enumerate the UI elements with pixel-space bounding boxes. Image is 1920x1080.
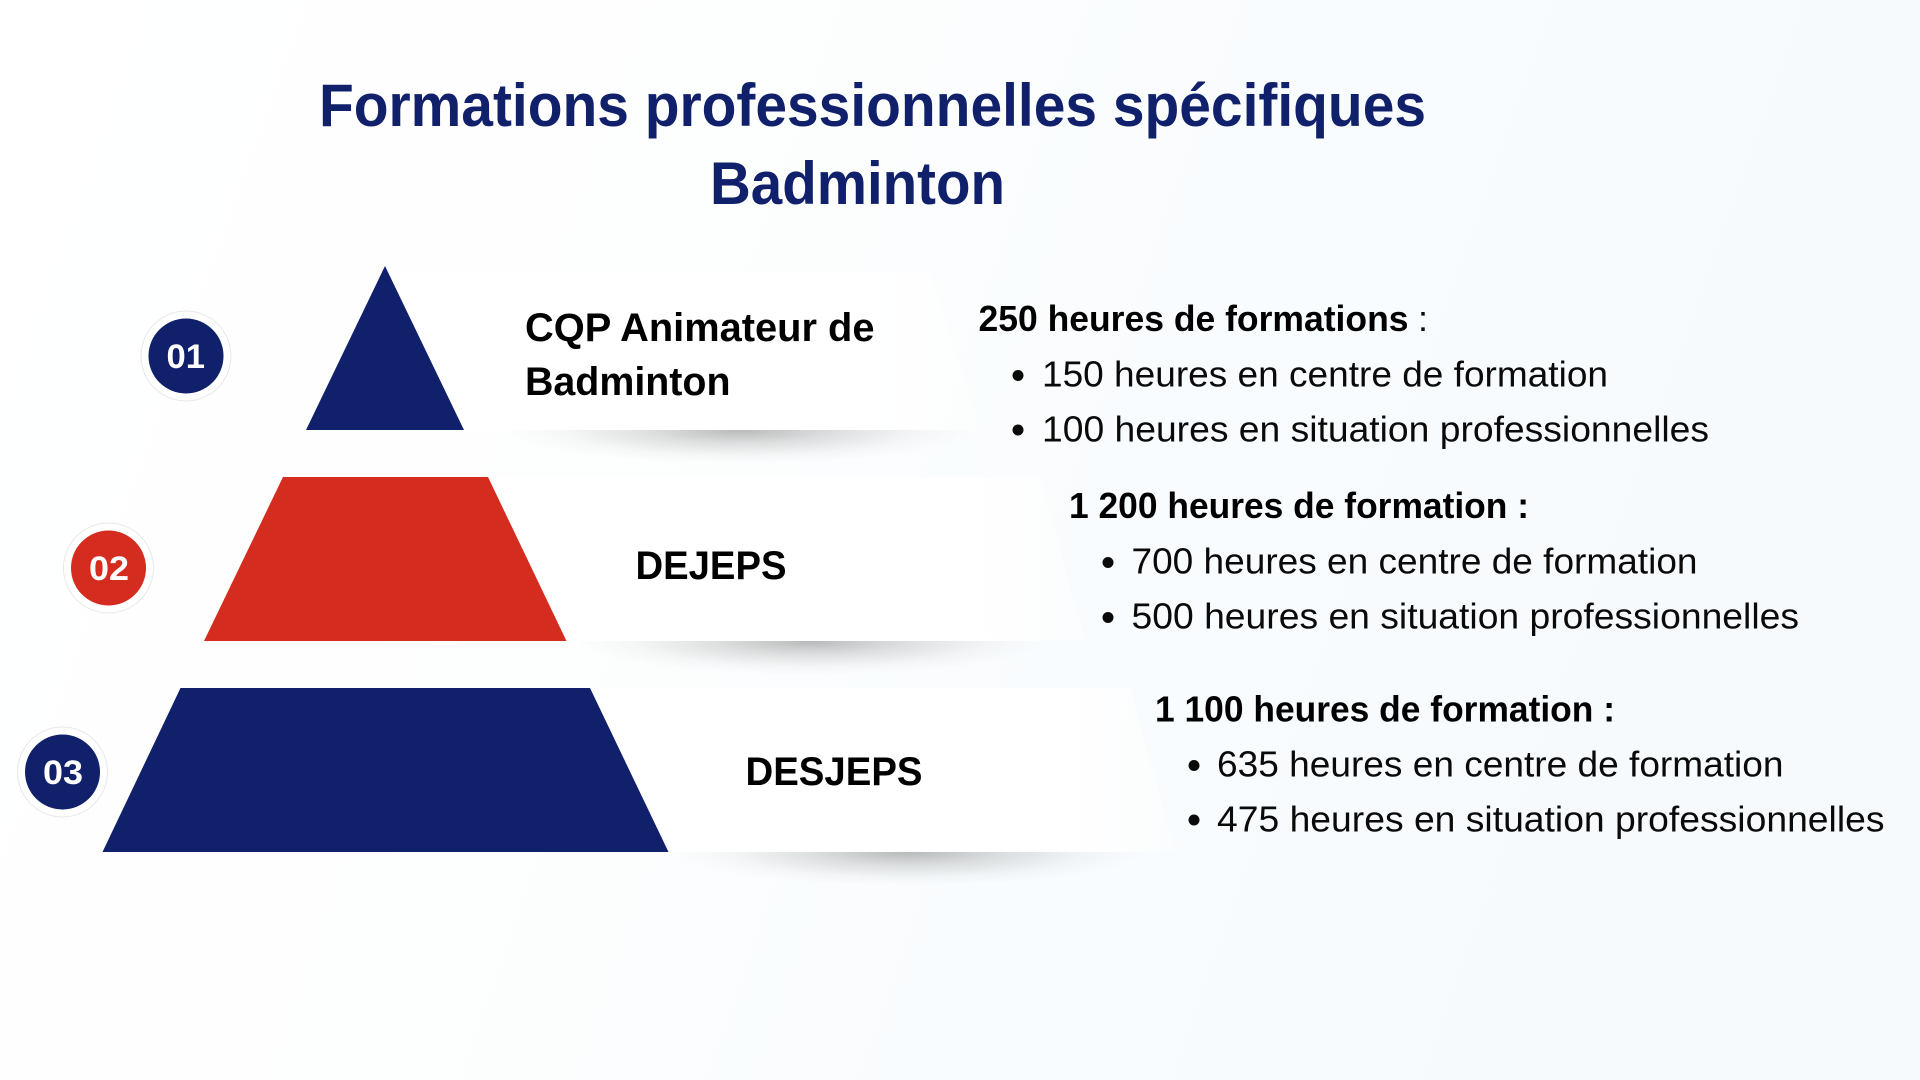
- badge 01: [141, 311, 231, 401]
- details: DESJEPS hours: 1 100 heures de formation :: [1155, 688, 1615, 730]
- details: DEJEPS hours: 1 200 heures de formation :: [1069, 485, 1529, 526]
- details: CQP hours: 100 heures en situation professionnelles: [1042, 408, 1709, 450]
- label: CQP Animateur de Badminton: CQP Animateur de: [525, 306, 874, 350]
- badge 01: 01: [166, 338, 205, 376]
- details: CQP hours: 150 heures en centre de formation: [1042, 354, 1608, 394]
- details: DEJEPS hours: 700 heures en centre de formation: [1132, 540, 1698, 582]
- badge 03: [18, 727, 108, 817]
- details: CQP hours: :: [1418, 298, 1428, 339]
- label: DESJEPS: DESJEPS: [746, 750, 922, 794]
- details: DESJEPS hours: 475 heures en situation professionnelles: [1217, 798, 1884, 840]
- label: CQP Animateur de Badminton: Badminton: [525, 360, 730, 404]
- badge 03: 03: [43, 754, 83, 792]
- details: DEJEPS hours: [1069, 485, 1799, 636]
- tier 3 label panel: [580, 688, 1175, 852]
- pyramid tier 1 triangle: [306, 266, 464, 430]
- details: DESJEPS hours: 635 heures en centre de formation: [1217, 744, 1784, 784]
- badge 02: 02: [89, 550, 129, 588]
- tier 1 label panel: [400, 272, 980, 430]
- tier 2 label panel: [480, 477, 1085, 641]
- title: Badminton: [710, 150, 1005, 217]
- title: [319, 72, 1426, 217]
- details: CQP hours: 250 heures de formations: [978, 298, 1408, 339]
- pyramid tier 2 trapezoid: [204, 477, 566, 641]
- tier 1 shadow: [505, 396, 975, 464]
- tier 2 shadow: [575, 607, 1045, 675]
- label: CQP Animateur de Badminton: [525, 306, 874, 404]
- details: CQP hours: [978, 298, 1709, 450]
- label: DEJEPS: DEJEPS: [636, 544, 786, 588]
- tier 3 shadow: [673, 818, 1143, 886]
- details: DESJEPS hours: [1155, 688, 1884, 840]
- pyramid tier 3 trapezoid: [102, 688, 668, 852]
- badge 02: [64, 523, 154, 613]
- details: DEJEPS hours: 500 heures en situation professionnelles: [1132, 596, 1799, 636]
- title: Formations professionnelles spécifiques: [319, 72, 1426, 139]
